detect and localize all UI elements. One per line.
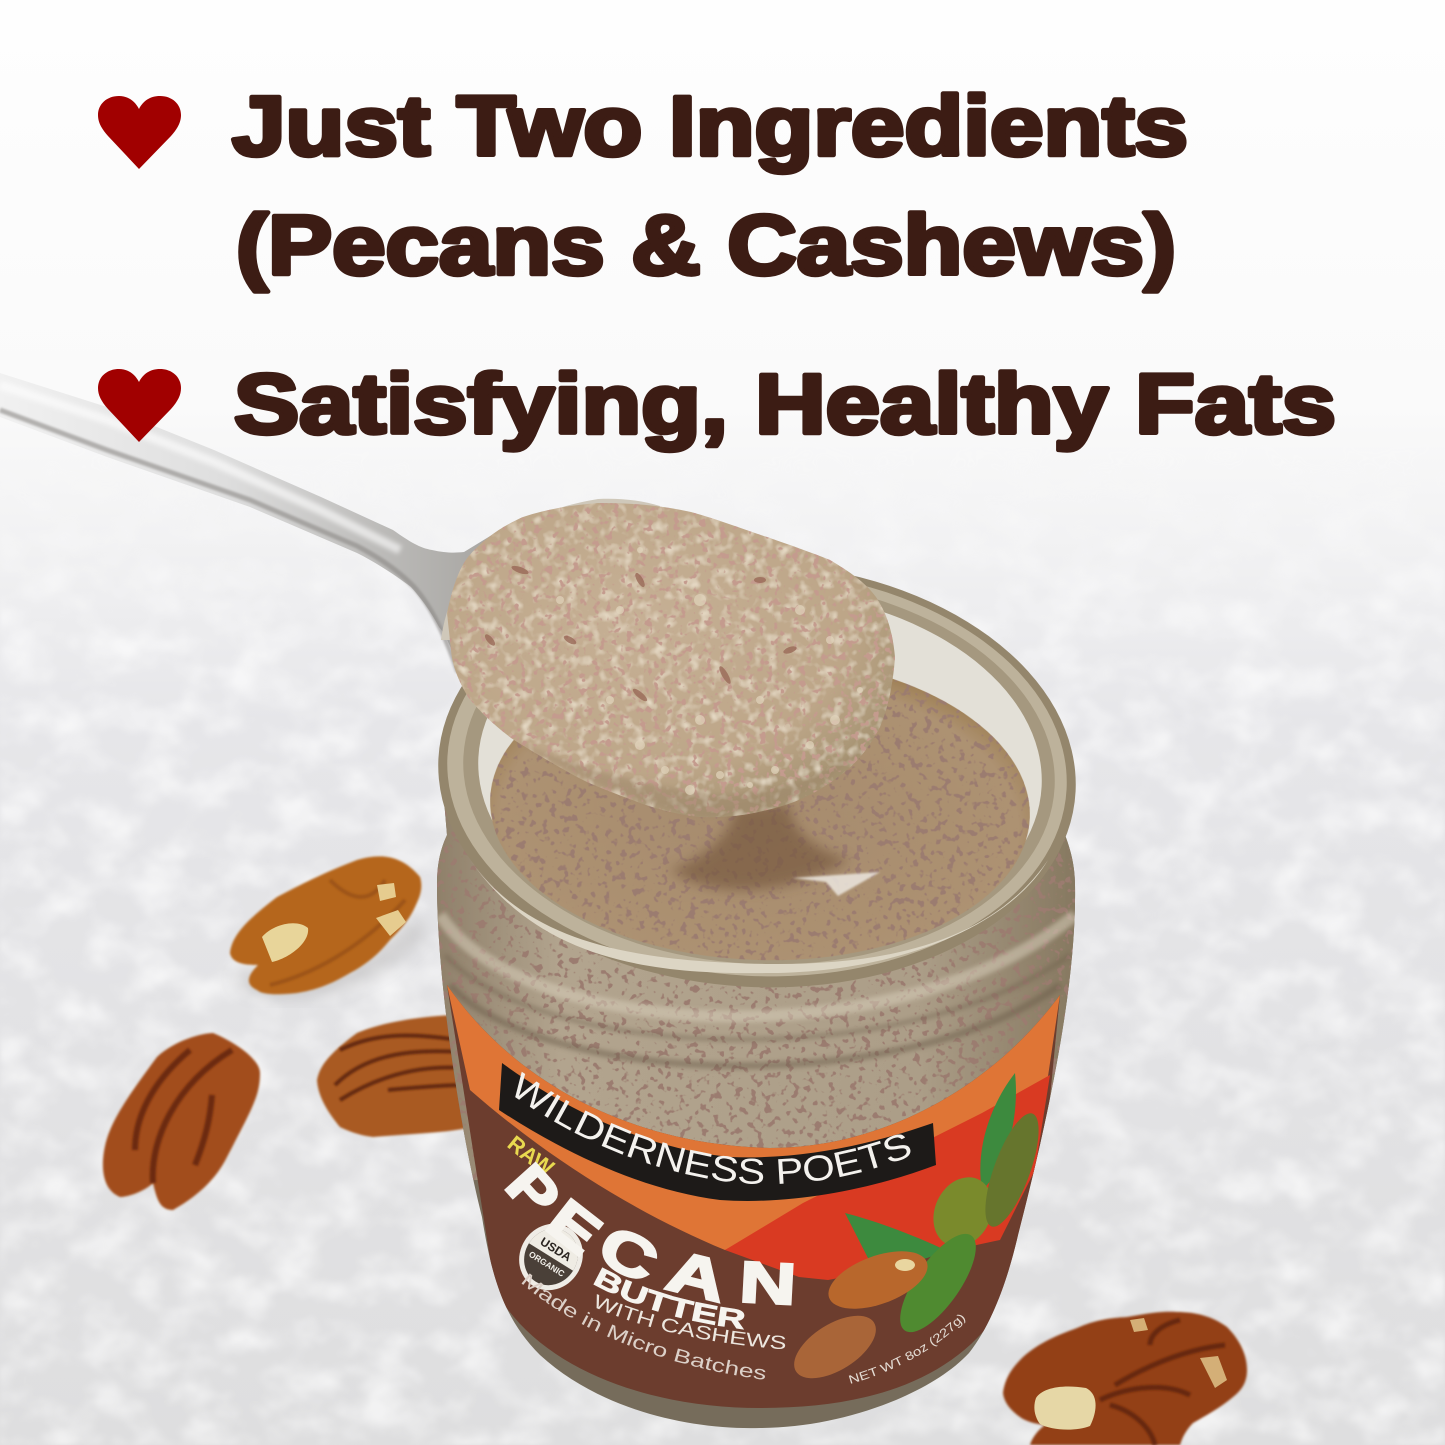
product name PECAN: E <box>535 1187 613 1267</box>
spoon <box>0 373 895 817</box>
product name PECAN <box>493 1152 798 1317</box>
product name PECAN: N <box>738 1249 798 1317</box>
USDA organic seal: USDA <box>538 1234 574 1264</box>
butter on spoon <box>447 503 895 817</box>
product name BUTTER: BUTTER <box>593 1267 744 1330</box>
heading line 3: Satisfying, Healthy Fats: Satisfying, Healthy Fats <box>234 357 1336 451</box>
jar shoulder with butter inside <box>430 800 1080 1180</box>
USDA organic seal: ORGANIC <box>527 1249 566 1279</box>
net weight: NET WT 8oz (227g) <box>848 1314 966 1384</box>
label orange band <box>447 985 1060 1250</box>
product label <box>447 985 1060 1408</box>
drip from spoon <box>670 805 850 890</box>
heading line 2: Pecans and Cashews: (Pecans & Cashews) <box>236 198 1176 292</box>
pecan: center left behind jar <box>317 1015 470 1137</box>
pecan: lower left <box>103 1033 260 1210</box>
background: marble surface fading to white <box>0 455 1445 1445</box>
USDA organic seal <box>507 1212 595 1302</box>
label pecan illustrations <box>794 1251 928 1378</box>
heart bullet 2 <box>98 369 181 442</box>
product name PECAN: A <box>660 1237 733 1314</box>
heart bullet 1 <box>98 96 181 169</box>
pecan: bottom right <box>1003 1312 1247 1445</box>
heading line 1: Just Two Ingredients: Just Two Ingredients <box>232 79 1188 173</box>
brand name: WILDERNESS POETS <box>515 1072 910 1184</box>
green leaf and olive illustration <box>845 1073 1049 1343</box>
with cashews: WITH CASHEWS <box>596 1294 786 1349</box>
butter surface in jar <box>485 647 1035 969</box>
spoon handle <box>0 373 500 680</box>
glossy highlight <box>792 872 880 896</box>
pecan: top left <box>230 856 421 994</box>
made in micro batches: Made in Micro Batches <box>522 1273 766 1380</box>
product name PECAN: P <box>493 1152 573 1230</box>
spoon rim <box>441 499 660 640</box>
jar rim and opening <box>427 547 1087 1003</box>
product name PECAN: C <box>589 1212 668 1296</box>
lumps on butter <box>556 547 863 795</box>
underside shading of butter <box>514 740 870 817</box>
brand banner <box>499 1063 936 1201</box>
label red wedge <box>725 1075 1050 1280</box>
label brown base <box>447 985 1060 1408</box>
jar body <box>437 808 1076 1428</box>
bran flecks on butter <box>483 564 798 703</box>
raw tag: RAW <box>507 1135 556 1173</box>
